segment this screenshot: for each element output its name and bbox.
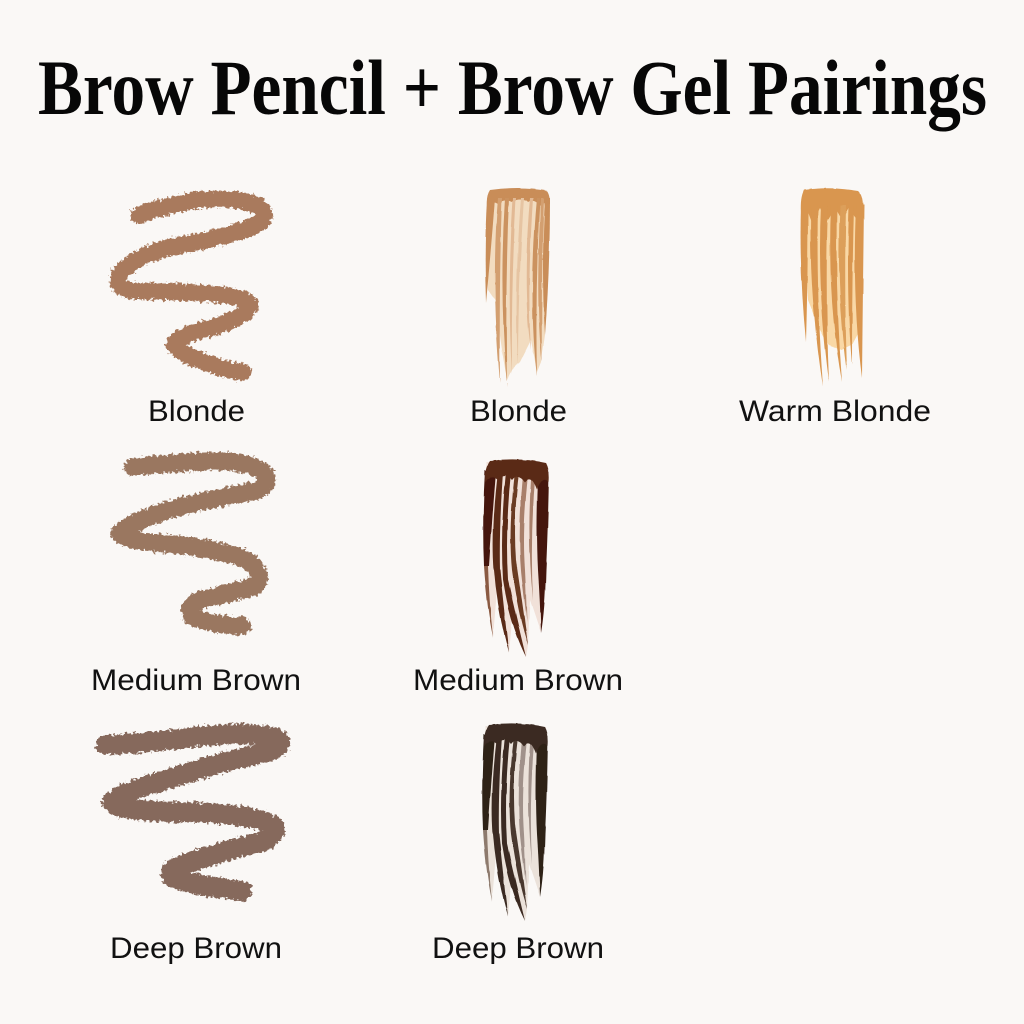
gel swatch: medium brown xyxy=(483,459,549,657)
label: gel medium brown: Medium Brown xyxy=(413,664,623,697)
label: pencil deep brown: Deep Brown xyxy=(110,932,282,965)
label: pencil medium brown: Medium Brown xyxy=(91,664,301,697)
gel swatch: warm blonde xyxy=(801,188,864,387)
pencil swatch: deep brown xyxy=(106,734,280,891)
label: gel warm blonde: Warm Blonde xyxy=(739,395,931,428)
gel swatch: blonde xyxy=(485,188,550,387)
pencil swatch: medium brown xyxy=(120,461,267,626)
gel swatch: deep brown xyxy=(482,723,548,921)
label: gel blonde: Blonde xyxy=(470,395,567,428)
pencil swatch: blonde xyxy=(118,199,264,372)
label: pencil blonde: Blonde xyxy=(148,395,245,428)
label: gel deep brown: Deep Brown xyxy=(432,932,604,965)
